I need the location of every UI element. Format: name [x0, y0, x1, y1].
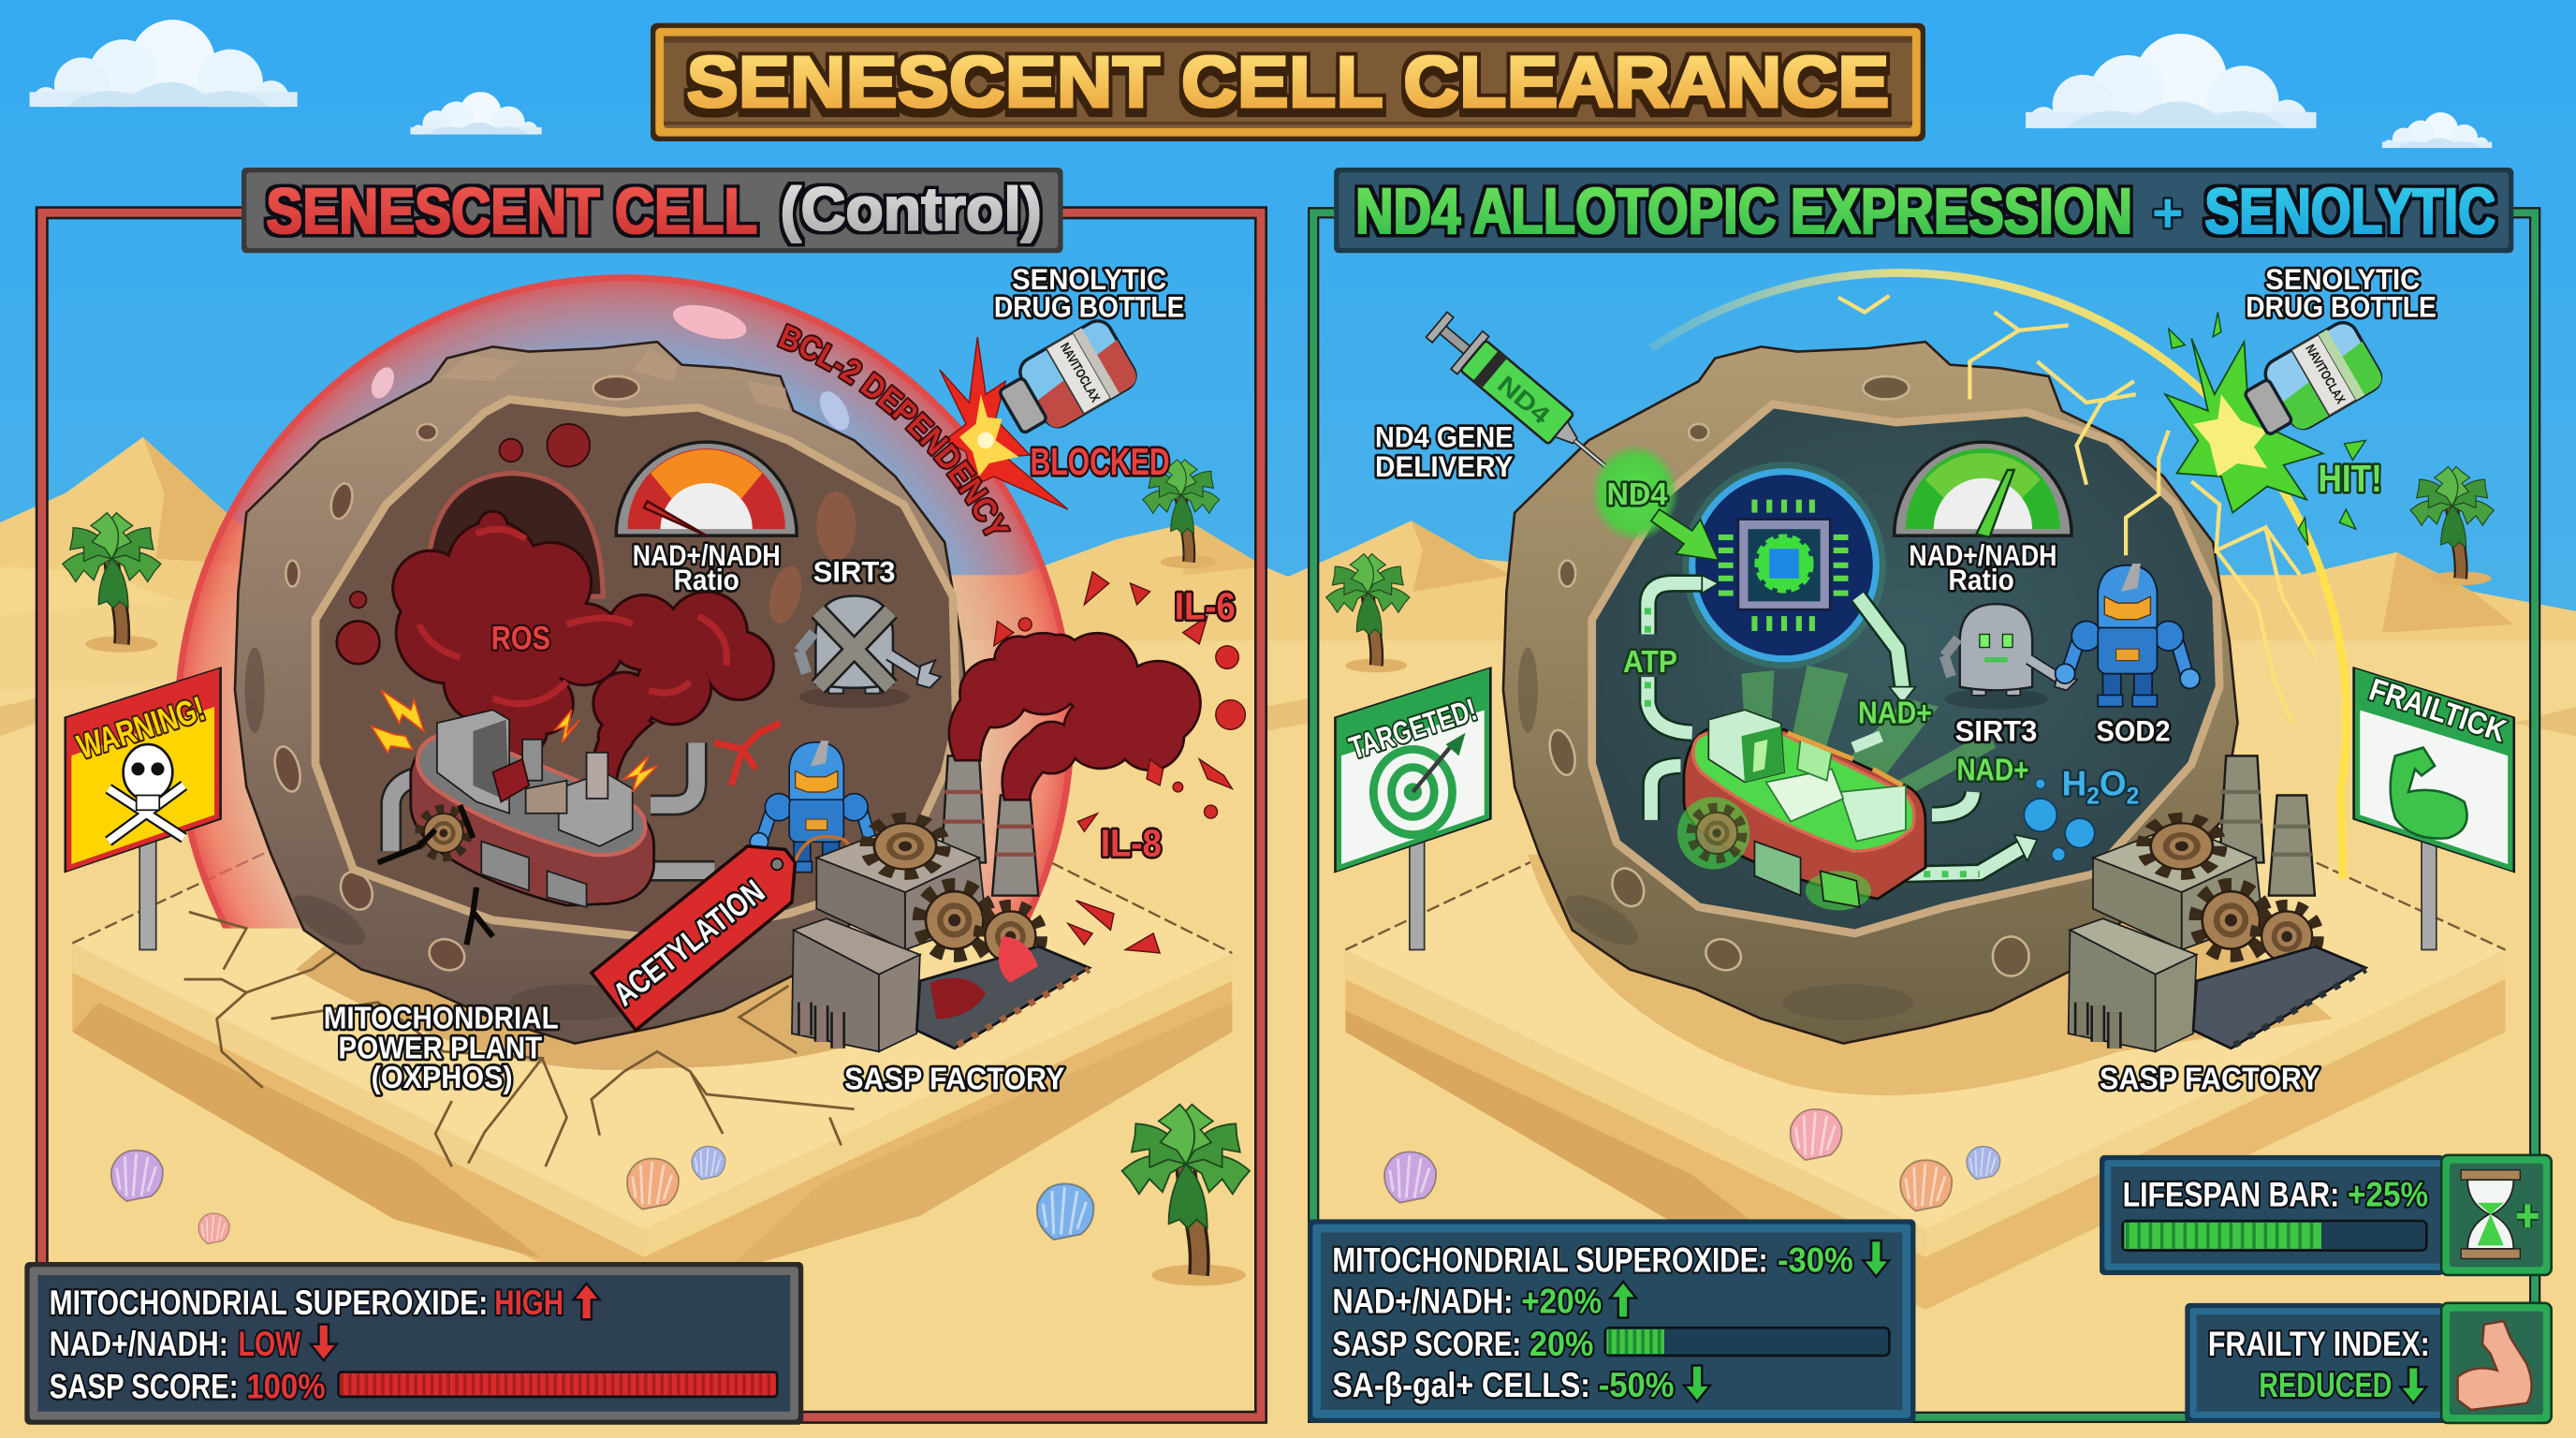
- cloud: top right large: [2026, 34, 2316, 139]
- label: ATP: ATP: [1623, 645, 1677, 680]
- burst: drug blocked: [940, 337, 1068, 509]
- conveyor belt: [2193, 946, 2365, 1049]
- gauge label: NAD+/NADH: [1909, 538, 2056, 572]
- drug bottle: left: [992, 315, 1141, 446]
- glow beams: [1741, 666, 1996, 797]
- chimneys: [2219, 756, 2264, 862]
- label: NAD+ lower: NAD+: [1956, 754, 2029, 788]
- label: mitochondrial power plant: MITOCHONDRIAL: [324, 1002, 559, 1036]
- label: BCL-2 dependency curved: BCL-2 DEPENDENCY: [777, 322, 1011, 536]
- tag: ACETYLATION: ACETYLATION: [607, 873, 771, 1013]
- rock blotches: [440, 348, 788, 411]
- palm tree: left panel far: [1141, 459, 1221, 568]
- H2O2 droplets and label: 2: [2127, 784, 2139, 809]
- header title red: SENESCENT CELL: [266, 175, 757, 247]
- label: ND4 gene delivery: ND4 GENE: [1375, 419, 1513, 453]
- complex I chip: [1682, 462, 1886, 668]
- row: NAD: NAD+/NADH:: [50, 1325, 228, 1363]
- gauge: NAD+/NADH restored: Ratio: [1949, 563, 2014, 596]
- row: SA-beta-gal: SA-β-gal+ CELLS:: [1332, 1366, 1590, 1404]
- craters: [1545, 376, 2029, 976]
- label: senolytic drug bottle right: DRUG BOTTLE: [2246, 290, 2437, 324]
- robot: SIRT3 restored: [1944, 604, 2077, 748]
- sign: targeted: TARGETED!: [1345, 693, 1481, 766]
- sign: frailtick: [2354, 668, 2513, 949]
- header title cyan: SENOLYTIC: [2204, 175, 2496, 247]
- label: senolytic drug bottle right: SENOLYTIC: [2265, 262, 2420, 296]
- row: superoxide: MITOCHONDRIAL SUPEROXIDE:: [1332, 1240, 1767, 1279]
- bubble shield: BCL-2 dome: [176, 274, 1073, 929]
- upper box: [2093, 825, 2256, 892]
- row: NAD: NAD+/NADH:: [1332, 1282, 1513, 1320]
- robot: SIRT3 restored: SIRT3: [1955, 714, 2037, 748]
- lifespan panel: [2100, 1155, 2445, 1275]
- warning sign: WARNING!: [73, 689, 210, 766]
- capsule deck: [417, 734, 645, 855]
- drug bottle: right: NAVITOCLAX: [2303, 342, 2349, 406]
- row: superoxide: -30%: [1778, 1240, 1853, 1279]
- broken red molecule: [714, 723, 781, 785]
- lightning sparks: [372, 690, 657, 792]
- shattered golden dome with cracks: [1651, 272, 2347, 879]
- icon: green bicep: [2391, 748, 2467, 839]
- burst: drug hit: [2165, 312, 2365, 546]
- label: senolytic drug bottle right: [2246, 262, 2437, 324]
- warning sign: [66, 668, 220, 949]
- label: mitochondrial power plant: [324, 1002, 559, 1095]
- cell: left senescent rock shell: [235, 342, 970, 1044]
- row: superoxide: HIGH: [494, 1284, 564, 1322]
- title text: SENESCENT CELL CLEARANCE: [687, 42, 1889, 123]
- glowing gear: [1677, 797, 1749, 869]
- H2O2 droplets and label: H: [2062, 764, 2086, 802]
- gauge: NAD+/NADH low: Ratio: [674, 563, 739, 596]
- lifespan panel: LIFESPAN BAR:: [2123, 1175, 2339, 1213]
- header title grey: (Control): [781, 175, 1042, 243]
- row: SASP score with bar: SASP SCORE:: [1332, 1325, 1521, 1363]
- lower box: [2070, 918, 2197, 975]
- ROS label: ROS: [491, 620, 550, 656]
- robot: blue SOD2 tethered: [750, 741, 883, 879]
- flying cytokine particles: [994, 572, 1245, 953]
- capsule wall: [1684, 729, 1925, 899]
- label: mitochondrial power plant: POWER PLANT: [339, 1031, 542, 1065]
- header: right panel: [1334, 168, 2513, 253]
- membrane and cytoplasm: [315, 400, 956, 938]
- row: superoxide: MITOCHONDRIAL SUPEROXIDE:: [50, 1284, 488, 1322]
- chip pins: [1719, 500, 1848, 631]
- capsule deck: [1693, 733, 1914, 851]
- ROS smoke cloud: [337, 424, 772, 785]
- row: SASP score with bar: [1332, 1325, 1889, 1363]
- robot: SOD2 active: [2056, 564, 2200, 748]
- lower box: [794, 918, 920, 975]
- flow arrows: ATP and NAD+ loop: [1647, 575, 2037, 874]
- rock blotches: [1518, 648, 1914, 1020]
- H2O2 droplets and label: O: [2100, 764, 2127, 802]
- factory label: SASP FACTORY: [2100, 1063, 2320, 1097]
- robot: SIRT3 disabled: SIRT3: [813, 554, 896, 588]
- SASP factory: right dormant: [2069, 756, 2365, 1097]
- glowing machinery: [1708, 710, 1784, 782]
- organelles: [764, 492, 856, 627]
- cell: right restored rock shell: [1503, 342, 2237, 1044]
- platform: left isometric sand slab: [72, 670, 1232, 1314]
- cloud: top left large: [30, 20, 298, 117]
- chimneys: [942, 756, 986, 862]
- shell group: right panel: [1384, 1109, 2000, 1211]
- label: senolytic drug bottle left: SENOLYTIC: [1012, 262, 1166, 296]
- gear: [423, 812, 464, 854]
- icon tile: muscle: [2441, 1303, 2552, 1423]
- palm tree: left panel front: [1120, 1103, 1251, 1285]
- drug bottle: right: [2237, 317, 2386, 447]
- cytokine labels: IL-6: [1175, 585, 1236, 628]
- cloud: top right small: [2382, 112, 2492, 152]
- ND4 glow with label and arrow: [1590, 444, 1719, 561]
- stats panel: right: [1308, 1219, 1915, 1423]
- sign: targeted: [1336, 668, 1490, 949]
- shell group: left panel: [111, 1146, 1093, 1244]
- gears: [2201, 889, 2261, 951]
- frailty panel: REDUCED: [2259, 1366, 2392, 1404]
- panel frame: right: [1313, 213, 2535, 1417]
- label: hit: HIT!: [2318, 457, 2382, 500]
- lifespan bar: [2123, 1221, 2426, 1251]
- cracks: dried ground: [184, 912, 855, 1167]
- factory smoke: [950, 634, 1199, 799]
- label: senolytic drug bottle left: [994, 262, 1184, 324]
- sign: frailtick: FRAILTICK: [2365, 672, 2510, 749]
- control panels: [1754, 842, 1801, 896]
- icon: target with dart: [1373, 733, 1466, 835]
- control panels: [481, 842, 529, 890]
- machinery: [437, 710, 509, 814]
- gears: [924, 889, 986, 951]
- row: SASP score with bar: SASP SCORE:: [50, 1368, 238, 1406]
- ND4 glow with label and arrow: ND4: [1606, 477, 1668, 512]
- syringe: ND4 gene delivery: ND4: [1492, 370, 1556, 430]
- platform: right isometric sand slab: [1345, 674, 2506, 1310]
- label: blocked: BLOCKED: [1030, 440, 1170, 483]
- title banner: [651, 23, 1925, 141]
- SASP factory: left active: IL-8: [1101, 821, 1162, 864]
- stats panel: left: [24, 1262, 803, 1425]
- palm tree: right panel small left: [1325, 552, 1411, 672]
- header: left panel: [242, 168, 1063, 253]
- label: ND4 gene delivery: [1375, 419, 1513, 483]
- row: SASP score with bar: 20%: [1530, 1325, 1593, 1363]
- SASP factory: left active: [792, 572, 1245, 1097]
- conveyor belt: [916, 946, 1090, 1049]
- label: mitochondrial power plant: (OXPHOS): [372, 1061, 513, 1095]
- syringe: ND4 gene delivery: [1421, 306, 1621, 485]
- craters: [271, 376, 639, 976]
- icon tile: hourglass plus: [2441, 1155, 2552, 1275]
- black cracks: [378, 805, 493, 945]
- row: NAD: LOW: [238, 1325, 300, 1363]
- H2O2 droplets and label: [2024, 764, 2139, 861]
- H2O2 droplets and label: 2: [2086, 784, 2100, 809]
- factory label: SASP FACTORY: [844, 1063, 1064, 1097]
- drug bottle: left: NAVITOCLAX: [1058, 340, 1104, 404]
- palm tree: right panel far: [2409, 465, 2496, 585]
- cloud: top left small: [410, 92, 542, 139]
- membrane and cytoplasm: [1592, 404, 2219, 933]
- skull and crossbones: [109, 744, 184, 842]
- frailty panel: FRAILTY INDEX:: [2208, 1325, 2430, 1363]
- gauge: NAD+/NADH low: [616, 442, 797, 596]
- panel frame: left: [42, 213, 1261, 1417]
- row: SASP score with bar: 100%: [246, 1368, 326, 1406]
- label: NAD+ upper: NAD+: [1858, 696, 1932, 730]
- row: SA-beta-gal: -50%: [1599, 1366, 1674, 1404]
- robot: SOD2 active: SOD2: [2097, 714, 2170, 748]
- upper box: [816, 825, 979, 892]
- palm tree: left panel small: [61, 511, 163, 653]
- label: senolytic drug bottle left: DRUG BOTTLE: [994, 290, 1184, 324]
- gauge: NAD+/NADH restored: [1895, 442, 2071, 596]
- lifespan panel: +25%: [2348, 1175, 2428, 1213]
- capsule wall: [411, 741, 654, 905]
- mitochondrion cavity: [427, 473, 603, 596]
- label: ND4 gene delivery: DELIVERY: [1375, 449, 1513, 483]
- header plus sign: +: [2152, 181, 2184, 243]
- gauge label: NAD+/NADH: [633, 538, 781, 572]
- row: SASP score with bar: [50, 1368, 777, 1406]
- robot: SIRT3 disabled: [799, 554, 941, 708]
- mitochondrial power plant: restored: [1677, 666, 1996, 910]
- mitochondrial power plant: damaged: [372, 690, 781, 945]
- frailty panel: [2185, 1303, 2445, 1423]
- pipes: [391, 775, 424, 851]
- row: NAD: +20%: [1521, 1282, 1602, 1320]
- header title green: ND4 ALLOTOPIC EXPRESSION: [1355, 175, 2132, 247]
